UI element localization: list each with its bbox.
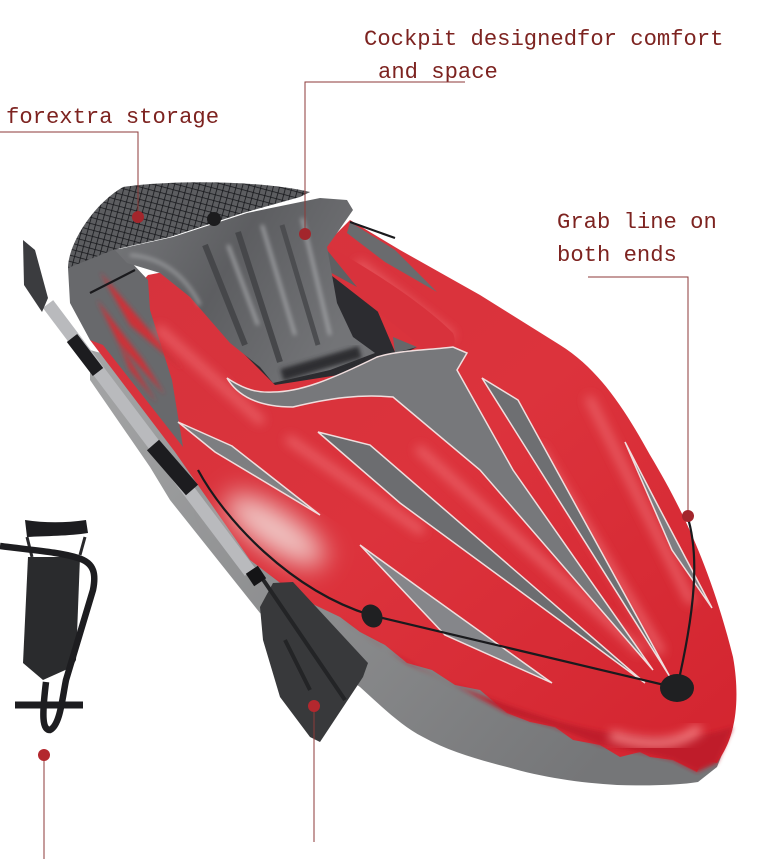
callout text: grab line: both ends: [557, 243, 677, 268]
hose: [0, 546, 94, 730]
glare patch: [215, 482, 335, 578]
storage net: [68, 182, 310, 268]
callout text: grab line: [557, 210, 717, 268]
red hull body: [90, 220, 736, 772]
outer tube stripe: [347, 222, 437, 292]
callout line: cockpit: [299, 82, 465, 240]
cockpit opening: [230, 250, 417, 385]
barrel: [23, 557, 80, 680]
paddle: [23, 240, 368, 742]
callout text: cockpit: Cockpit designedfor comfort: [364, 27, 724, 52]
bow crease highlight: [610, 728, 700, 743]
callout text: extra storage: forextra storage: [6, 105, 219, 130]
blade: [260, 582, 368, 742]
deck valve: [207, 212, 221, 226]
inflatable seat: [115, 198, 375, 383]
upper clamps: [72, 338, 98, 372]
cockpit floor: [393, 337, 417, 353]
handle: [25, 520, 88, 537]
callout text: cockpit: [364, 27, 724, 85]
bow cap: [660, 674, 694, 702]
foot bar: [15, 702, 83, 708]
callout line: grab line: [588, 277, 694, 522]
grey deck wedge: [227, 347, 653, 670]
stern flames: [97, 272, 183, 403]
callout text: cockpit: and space: [378, 60, 498, 85]
kayak: [68, 182, 736, 785]
blade ribs: [262, 578, 345, 700]
lower clamps: [153, 445, 192, 490]
seat ribs: [130, 218, 360, 375]
pump: [0, 520, 94, 730]
callout line: paddle: [308, 700, 320, 842]
line anchor: [357, 601, 387, 631]
deck stripes: [178, 378, 712, 683]
upper blade: [23, 240, 48, 312]
collar: [250, 572, 262, 580]
shaft: [48, 304, 250, 572]
inner tube grey flame: [326, 250, 357, 287]
callout line: pump: [38, 749, 50, 859]
callout text: grab line: Grab line on: [557, 210, 717, 235]
grab line: [90, 222, 694, 688]
inner right tube: [327, 247, 455, 350]
grey stern deck: [68, 245, 183, 447]
scalloped red shadow edge: [340, 617, 733, 772]
callout line: extra storage: [0, 132, 144, 223]
deck highlights: [160, 265, 690, 650]
hull underside: [90, 350, 733, 785]
